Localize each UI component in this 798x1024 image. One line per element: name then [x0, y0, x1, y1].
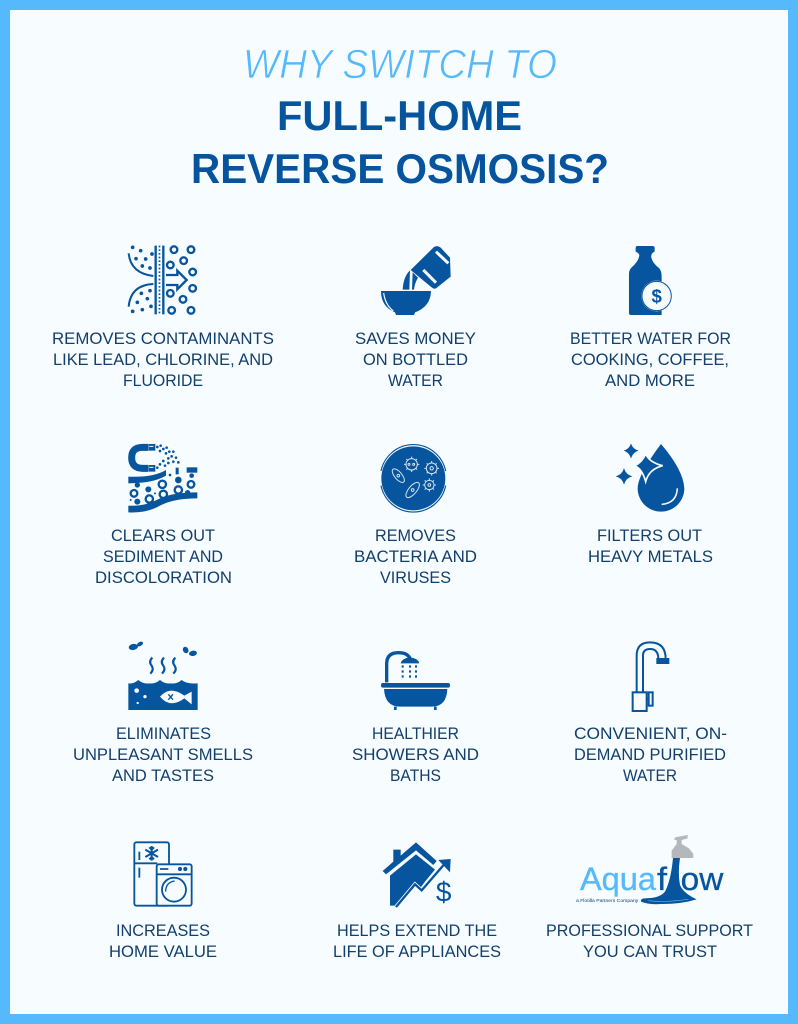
label: HOME VALUE	[109, 943, 217, 961]
panel: removes contaminants	[52, 245, 274, 390]
icon: sparkling water drop	[616, 443, 684, 512]
label: PROFESSIONAL SUPPORT	[546, 922, 753, 940]
label: VIRUSES	[380, 569, 451, 587]
title line: full-home: FULL-HOME	[277, 92, 522, 139]
panel: professional support	[546, 835, 753, 961]
label: FLUORIDE	[123, 372, 203, 390]
icon: bottle with dollar coin: $	[651, 286, 662, 307]
label: AND TASTES	[112, 767, 214, 785]
logo: Aquaflow: f	[657, 860, 668, 897]
panel: better water	[570, 246, 731, 390]
label: ON BOTTLED	[363, 351, 468, 369]
panel: extend appliance life	[333, 842, 501, 961]
label: ELIMINATES	[116, 725, 211, 743]
label: COOKING, COFFEE,	[571, 351, 729, 369]
label: WATER	[388, 372, 443, 390]
icon: bottle with dollar coin	[629, 246, 672, 315]
title line: why switch to: WHY SWITCH TO	[243, 41, 557, 87]
logo wordmark: Aqua	[580, 860, 657, 897]
label: YOU CAN TRUST	[583, 943, 717, 961]
icon: bacteria in circle	[381, 445, 446, 512]
panel: home value	[109, 842, 217, 961]
label: HELPS EXTEND THE	[337, 922, 497, 940]
label: REMOVES CONTAMINANTS	[52, 330, 274, 348]
label: UNPLEASANT SMELLS	[73, 746, 253, 764]
logo: Aquaflow	[576, 835, 724, 904]
label: WATER	[623, 767, 677, 785]
panel: showers and baths	[352, 653, 479, 785]
label: HEALTHIER	[372, 725, 459, 743]
label	[588, 527, 713, 566]
label	[570, 330, 731, 390]
logo: Aquaflow: ow	[681, 860, 724, 897]
label	[109, 922, 217, 961]
label	[52, 330, 274, 390]
label: FILTERS OUT	[597, 527, 702, 545]
logo tagline: a Flotilla Partners Company	[576, 898, 639, 903]
label: HEAVY METALS	[588, 548, 713, 566]
logo puddle highlight	[648, 899, 688, 901]
label: CONVENIENT, ON-	[574, 725, 727, 743]
panel: heavy metals	[588, 443, 713, 566]
icon: carton pouring into bowl	[381, 246, 451, 315]
icon: magnet and sediment	[128, 444, 197, 512]
label	[574, 725, 727, 785]
label: BATHS	[390, 767, 441, 785]
icon: smelly water with fish	[128, 641, 198, 710]
panel: clears sediment	[95, 444, 232, 587]
title	[191, 41, 609, 192]
label	[73, 725, 253, 785]
panel: smells and tastes	[73, 641, 253, 785]
label: SAVES MONEY	[355, 330, 476, 348]
icon: house with rising arrow and dollar	[383, 842, 452, 907]
panel: removes bacteria	[354, 445, 477, 587]
icon: fridge and washer	[134, 842, 192, 906]
icon: membrane filtration	[129, 245, 196, 314]
panel: on-demand water	[574, 642, 727, 785]
label: SEDIMENT AND	[103, 548, 223, 566]
label: DEMAND PURIFIED	[574, 746, 726, 764]
label	[352, 725, 479, 785]
label	[546, 922, 753, 961]
label: CLEARS OUT	[111, 527, 215, 545]
label: LIFE OF APPLIANCES	[333, 943, 501, 961]
label	[333, 922, 501, 961]
icon: house with rising arrow and dollar: $	[436, 876, 452, 907]
label: BACTERIA AND	[354, 548, 477, 566]
label	[354, 527, 477, 587]
logo water stream	[641, 858, 697, 904]
label: INCREASES	[116, 922, 210, 940]
icon: faucet	[633, 642, 668, 711]
logo tap	[672, 835, 693, 858]
label: SHOWERS AND	[352, 746, 479, 764]
icon: bathtub with shower	[381, 653, 450, 710]
panel: saves money	[355, 246, 476, 390]
label: AND MORE	[605, 372, 695, 390]
label	[355, 330, 476, 390]
label	[95, 527, 232, 587]
label: DISCOLORATION	[95, 569, 232, 587]
label: LIKE LEAD, CHLORINE, AND	[53, 351, 273, 369]
label: BETTER WATER FOR	[570, 330, 731, 348]
title line: reverse osmosis: REVERSE OSMOSIS?	[191, 145, 609, 192]
label: REMOVES	[375, 527, 456, 545]
